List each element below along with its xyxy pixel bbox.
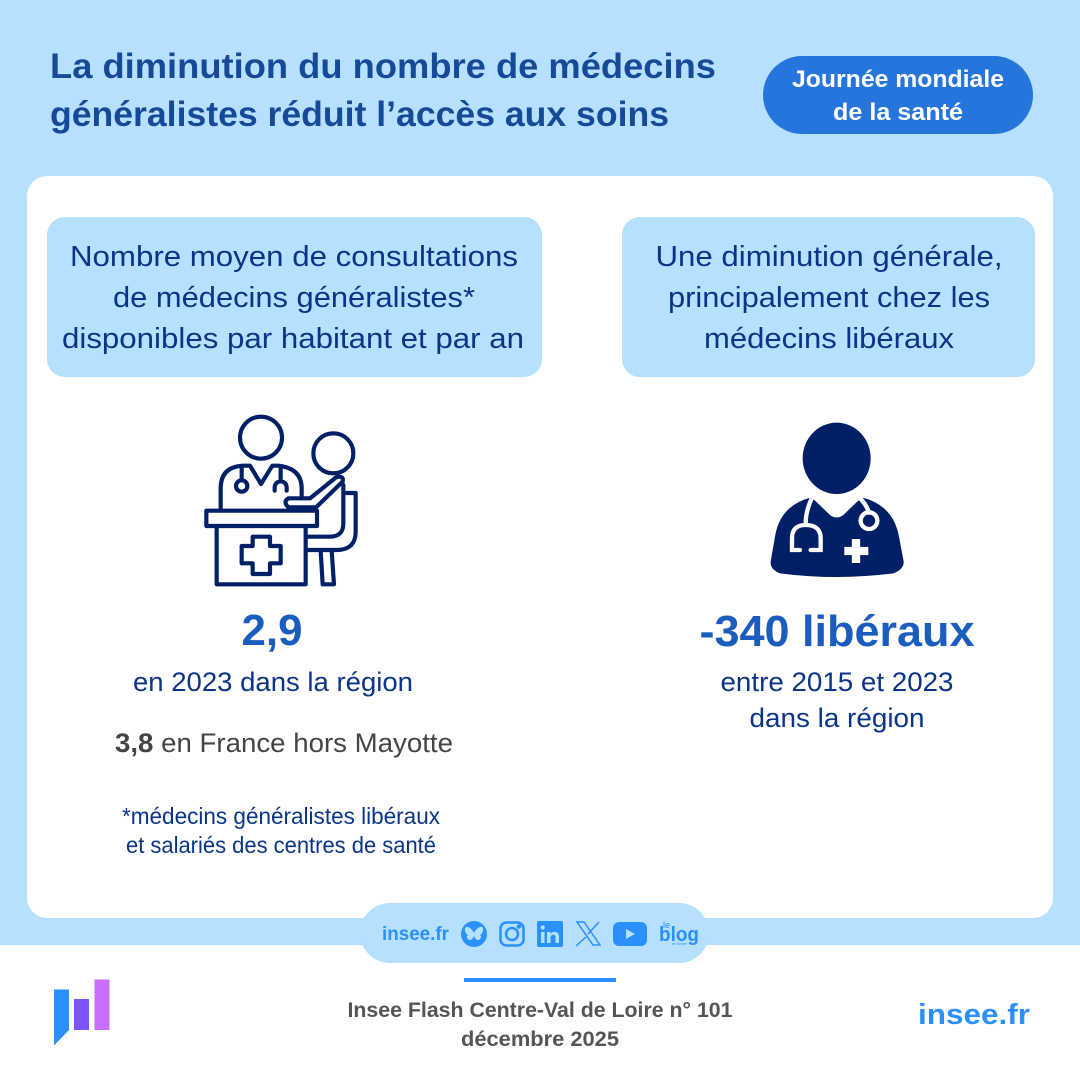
- title: La diminution du nombre de médecins: [50, 47, 716, 86]
- social links pill: insee.fr: [382, 924, 450, 945]
- stat: 2,9: 2,9: [242, 606, 302, 655]
- panel: left heading: Nombre moyen de consultations: [70, 241, 518, 273]
- icon: le blog: le: [663, 920, 670, 930]
- icon: youtube: [613, 922, 647, 946]
- text: 3,8 en France hors Mayotte: 3,8 en France hors Mayotte: [115, 728, 453, 758]
- logo: [54, 980, 110, 1046]
- title: généralistes réduit l’accès aux soins: [50, 95, 669, 134]
- panel: left heading: [47, 217, 542, 377]
- badge: Journée mondiale de la santé: de la santé: [833, 99, 963, 126]
- source: Insee Flash Centre-Val de Loire n° 101: [348, 999, 733, 1022]
- panel: right heading: [622, 217, 1035, 377]
- icon: le blog: de l'Insee: [672, 942, 687, 946]
- icon: doctor with stethoscope: [771, 423, 904, 577]
- footer rule: [464, 978, 616, 982]
- text: entre 2015 et 2023 dans la région: [720, 667, 954, 733]
- icon: instagram: [500, 922, 524, 946]
- footer link: insee.fr: insee.fr: [918, 999, 1030, 1031]
- stat: -340 libéraux: -340 libéraux: [700, 607, 975, 656]
- panel: right heading: médecins libéraux: [704, 323, 955, 355]
- source: décembre 2025: [461, 1028, 619, 1051]
- icon: doctor and patient at desk: [206, 417, 356, 584]
- icon: bluesky: [461, 921, 487, 947]
- icon: X: [576, 922, 600, 946]
- badge: Journée mondiale de la santé: [763, 56, 1033, 134]
- panel: left heading: disponibles par habitant et par an: [62, 323, 524, 355]
- text: entre 2015 et 2023 dans la région: entre 2015 et 2023: [720, 667, 954, 697]
- social links pill: [360, 903, 709, 963]
- footnote: *médecins généralistes libéraux: [122, 803, 440, 829]
- text: en 2023 dans la région: en 2023 dans la région: [133, 667, 413, 697]
- icon: le blog: blog: [659, 924, 699, 946]
- text: entre 2015 et 2023 dans la région: dans la région: [750, 703, 924, 733]
- panel: left heading: de médecins généralistes*: [113, 282, 475, 314]
- icon: linkedin: [537, 921, 563, 947]
- panel: right heading: principalement chez les: [668, 282, 990, 314]
- title: [50, 47, 716, 134]
- source: [348, 999, 733, 1051]
- footnote: et salariés des centres de santé: [126, 832, 436, 858]
- main white panel: [27, 176, 1053, 918]
- footnote: [122, 803, 440, 858]
- badge: Journée mondiale de la santé: Journée mondiale: [792, 66, 1004, 93]
- panel: right heading: Une diminution générale,: [656, 241, 1002, 273]
